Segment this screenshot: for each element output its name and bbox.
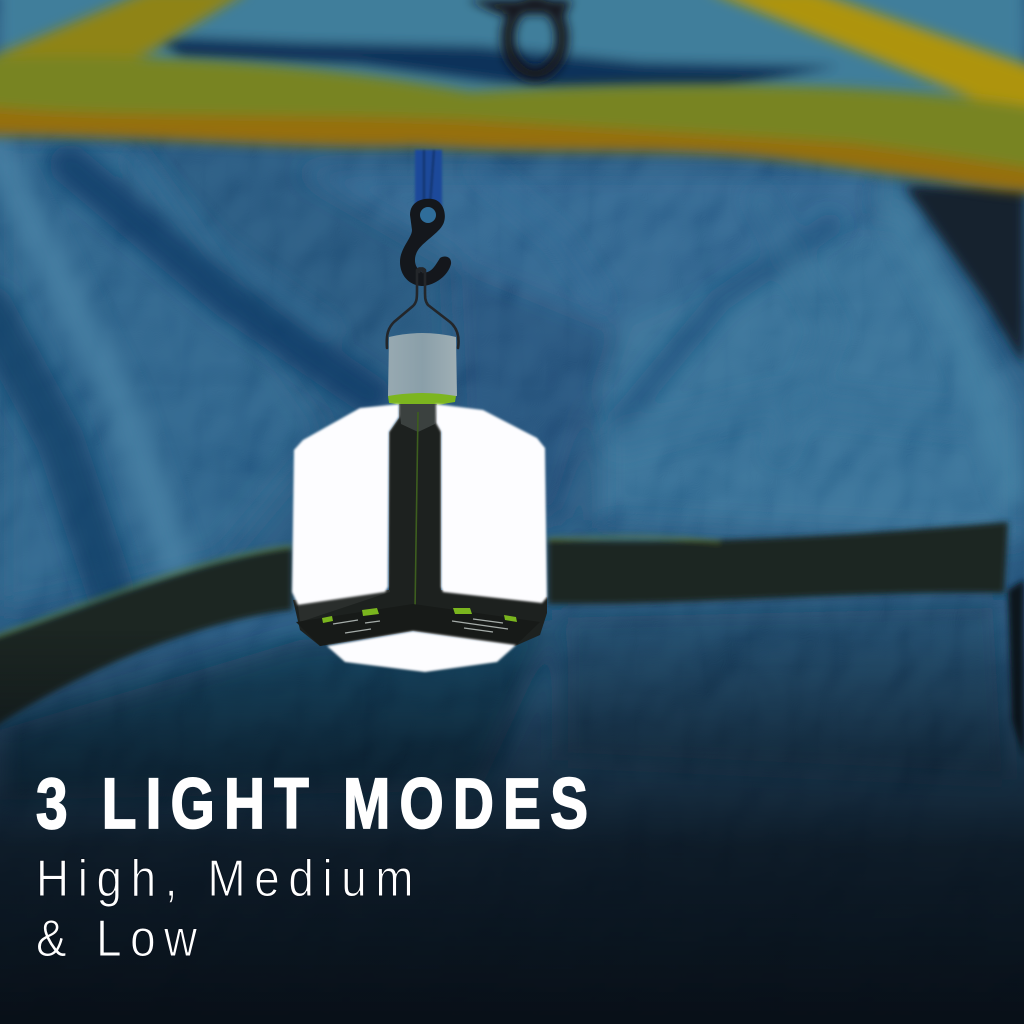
- subtitle line 2: & Low: [36, 910, 198, 968]
- strap: [415, 150, 442, 208]
- hook: [400, 199, 451, 286]
- lantern with hook: [292, 150, 547, 672]
- cap: [388, 333, 457, 396]
- lantern dark frame: [293, 404, 547, 646]
- right light panel: [436, 404, 547, 603]
- subtitle: [36, 850, 414, 968]
- bottom darkening gradient: [0, 630, 1024, 1024]
- blurred tent loop: [468, 0, 572, 74]
- bottom light panel: [327, 631, 516, 672]
- green rim: [388, 393, 456, 410]
- wire handle: [387, 268, 459, 348]
- title: 3 LIGHT MODES: [36, 764, 588, 843]
- dark blue shadow: [155, 36, 840, 92]
- right dark corner panel: [905, 186, 1024, 365]
- tent roof: teal panel: [0, 0, 1024, 110]
- yellow straps and band: [0, 0, 1024, 193]
- hand placed creases: [0, 150, 1015, 590]
- dark tent seam band: [0, 522, 1024, 760]
- tent fabric folds: [0, 140, 1024, 800]
- subtitle line 1: High, Medium: [36, 850, 414, 908]
- silver markings: [333, 619, 508, 633]
- green buttons: [322, 608, 517, 623]
- left light panel: [292, 404, 399, 605]
